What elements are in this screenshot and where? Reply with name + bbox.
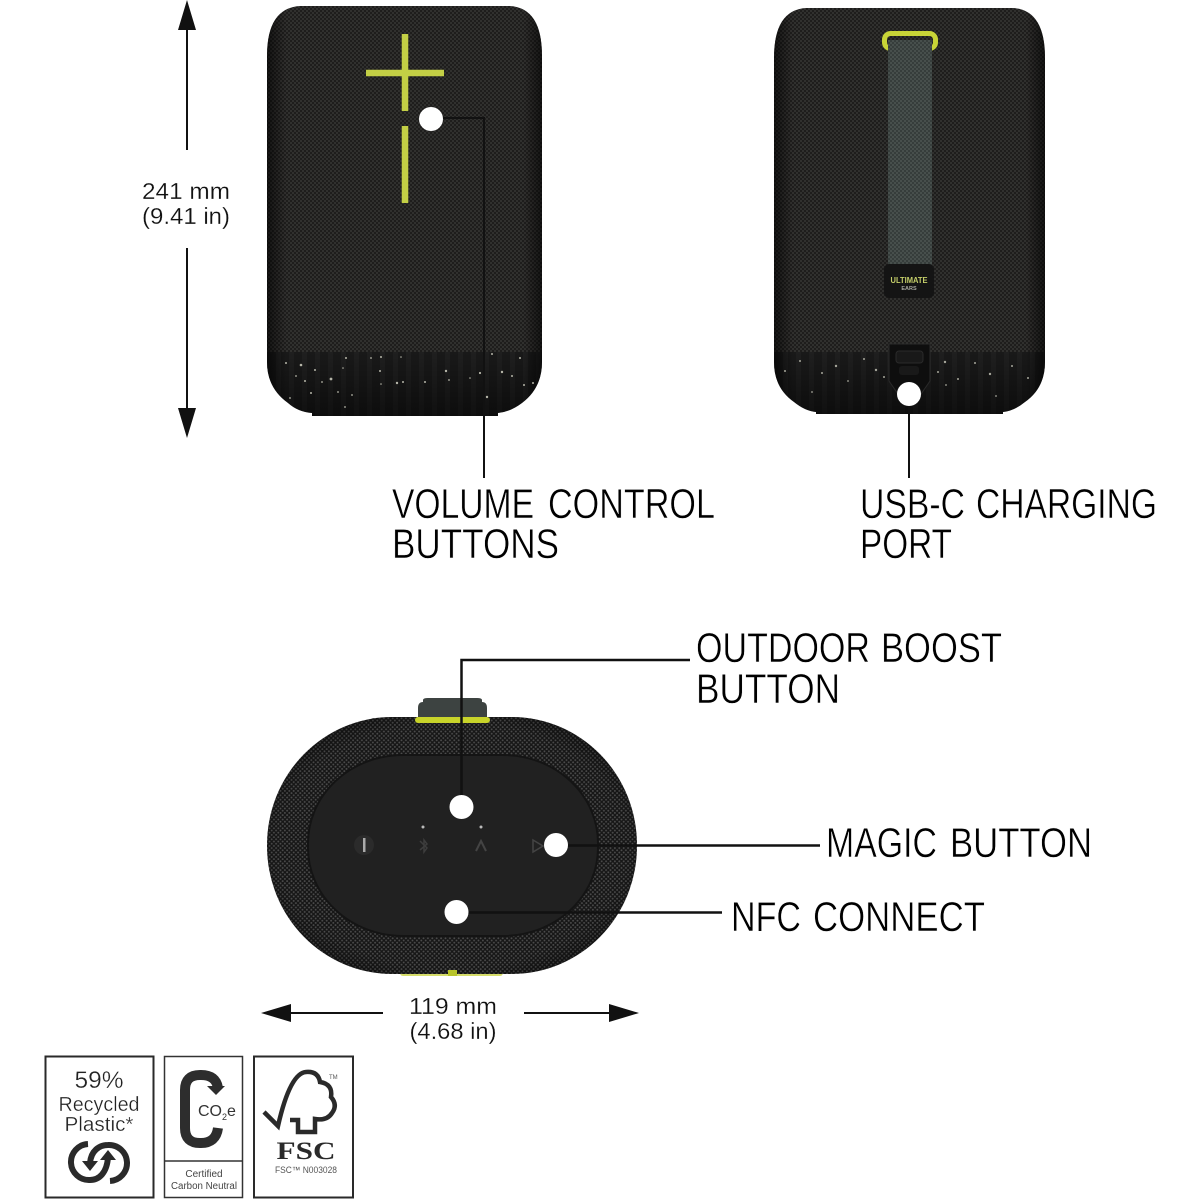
callout: volume control buttons: CONTROL [548,480,715,527]
icon: fsc tree check [264,1072,335,1132]
yellow bottom clip [400,970,503,976]
callout: magic button: MAGIC [826,819,937,866]
icon: party mode [476,826,486,851]
badge: fsc: TM [329,1075,338,1081]
callout: outdoor boost button: OUTDOOR [696,624,870,671]
badge: recycled plastic: Recycled [58,1094,140,1116]
height label: (9.41 in) [142,203,230,229]
width dimension arrow [261,993,639,1044]
badge: fsc: FSC [276,1138,336,1165]
icon: bluetooth [420,826,427,852]
height label [142,178,230,229]
mesh body [267,717,637,974]
yellow clip [415,717,490,723]
callout: usb-c charging port [860,382,1157,567]
callout: nfc connect: NFC [731,893,801,940]
strap logo tab [884,264,934,298]
badge: fsc [254,1056,353,1198]
yellow center notch [448,970,457,976]
co2e label: 2 [222,1112,227,1122]
strap loop [884,34,936,48]
height label: 241 mm [142,178,230,204]
top view of speaker [267,698,637,976]
callout: volume control buttons: VOLUME [392,480,534,527]
badge: fsc: FSC™ N003028 [275,1165,337,1175]
callout: nfc connect: CONNECT [813,893,985,940]
callout: usb-c charging port: PORT [860,520,952,567]
width label [409,993,497,1044]
callout: magic button: BUTTON [950,819,1092,866]
icon: volume minus [402,126,408,203]
badge: carbon neutral [164,1056,243,1198]
callout: usb-c charging port: USB-C [860,480,965,527]
badge: carbon neutral: Carbon Neutral [171,1181,237,1192]
inner control panel [308,755,598,936]
badge: recycled plastic: Plastic* [64,1114,134,1136]
strap top [418,698,487,717]
charging port cover [889,344,930,397]
strap [888,40,932,268]
icon: power [354,835,374,855]
front view of speaker [267,5,543,418]
badge: carbon neutral: Certified [185,1169,223,1180]
icon: magic [533,840,543,852]
badge: recycled plastic [46,1056,154,1198]
callout: outdoor boost button: BOOST [881,624,1002,671]
icon: recycle loop [71,1144,127,1181]
icon: carbon c [185,1075,218,1143]
back view of speaker [774,7,1045,416]
height dimension arrow [142,0,230,438]
icon: volume plus [366,34,444,111]
strap logo tab: EARS [901,286,917,292]
callout: usb-c charging port: CHARGING [976,480,1157,527]
co2e label: e [227,1103,236,1120]
co2e label: CO [198,1103,222,1120]
callout: volume control buttons [392,107,715,567]
badge: recycled plastic: 59% [74,1067,124,1094]
callout: magic button [544,819,1092,866]
width label: 119 mm [409,993,497,1019]
callout: outdoor boost button [450,624,1002,819]
callout: outdoor boost button: BUTTON [696,665,840,712]
width label: (4.68 in) [410,1018,496,1044]
strap logo tab: ULTIMATE [890,276,928,285]
callout: volume control buttons: BUTTONS [392,520,559,567]
callout: nfc connect [444,893,985,940]
